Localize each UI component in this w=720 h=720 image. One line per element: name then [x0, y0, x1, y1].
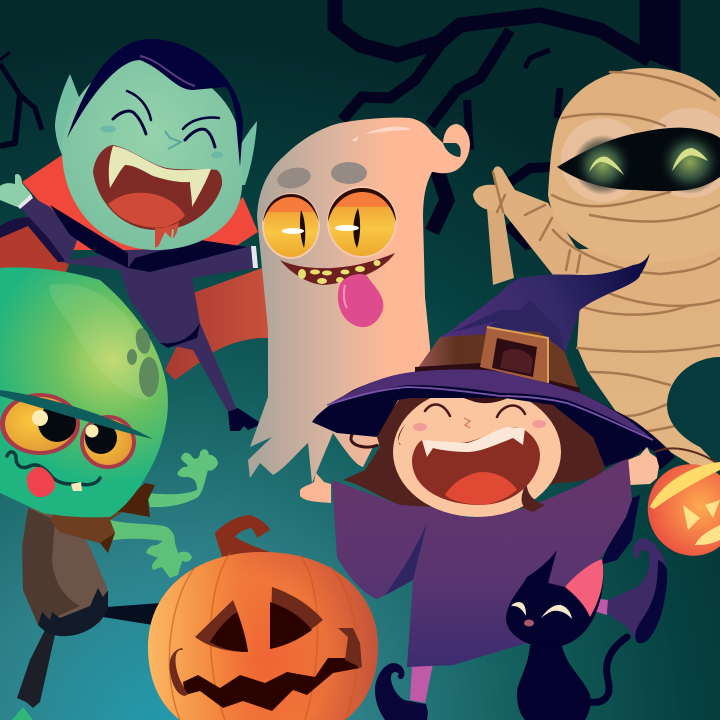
vampire tongue	[108, 193, 185, 248]
vampire lapels	[50, 205, 247, 272]
zombie foot	[12, 707, 33, 720]
zombie left eye	[0, 393, 80, 455]
witch hat band	[415, 330, 580, 393]
vampire head	[62, 60, 242, 250]
cat ear inner	[565, 559, 603, 617]
lantern face	[683, 500, 720, 545]
ghost spots	[275, 162, 367, 191]
vampire cuffs	[16, 194, 258, 268]
witch sleeve backing	[600, 495, 640, 565]
zombie mouth	[7, 452, 100, 485]
mummy bandage lines	[493, 72, 720, 432]
witch hat brim lip	[327, 387, 653, 440]
witch tongue	[445, 472, 517, 505]
witch hat crown shading	[450, 300, 565, 352]
witch left leg	[410, 664, 433, 703]
vampire eyes	[113, 91, 219, 147]
zombie upper arm	[147, 449, 218, 507]
ghost right eye	[327, 186, 397, 258]
witch left sideburn	[398, 425, 405, 445]
witch eyes	[425, 404, 525, 417]
witch hat brim underside	[312, 369, 675, 470]
witch hat brim top	[327, 369, 653, 440]
vampire left hand	[0, 174, 31, 207]
witch right boot	[607, 538, 667, 643]
pumpkin body	[148, 552, 378, 720]
zombie pants	[38, 588, 108, 636]
zombie tongue	[27, 467, 55, 497]
pumpkin left eye	[195, 600, 248, 652]
character: mummy	[473, 68, 720, 470]
zombie left leg	[17, 630, 56, 708]
lantern handle	[653, 448, 720, 505]
witch cheeks	[413, 420, 546, 431]
vampire cape collar	[22, 155, 258, 250]
pumpkin mouth	[183, 658, 360, 711]
witch hat buckle	[480, 327, 548, 383]
cat head	[506, 550, 603, 647]
witch right leg	[590, 598, 608, 615]
vampire hair	[67, 39, 243, 167]
vampire jacket bottom	[160, 323, 200, 348]
vampire mouth	[93, 145, 222, 230]
character: vampire	[0, 39, 268, 431]
witch nose	[464, 418, 470, 428]
vampire cheeks	[100, 126, 223, 158]
character: witch	[300, 253, 720, 720]
mummy eyes	[589, 148, 708, 175]
vampire right cape	[165, 268, 268, 380]
mummy body	[570, 240, 720, 470]
vampire nose	[165, 131, 181, 149]
pumpkin right eye	[270, 587, 323, 649]
witch robe	[332, 457, 632, 667]
lantern	[635, 448, 720, 568]
vampire torso and legs	[60, 246, 256, 412]
mummy forearm	[487, 208, 514, 285]
witch hair	[343, 388, 605, 508]
vampire left cape	[0, 221, 70, 282]
zombie tooth	[71, 482, 82, 491]
zombie right eye	[80, 415, 136, 469]
lantern body	[635, 452, 720, 568]
witch right hair lock	[522, 477, 545, 512]
ghost curl hook	[443, 143, 461, 157]
pumpkin stem	[215, 515, 270, 557]
witch hair curl	[351, 431, 378, 447]
character: zombie	[0, 267, 218, 720]
zombie collar	[50, 483, 155, 553]
lantern opening	[650, 462, 720, 509]
mummy eye band	[557, 128, 720, 191]
witch left hand	[300, 473, 331, 503]
ghost highlight	[352, 127, 411, 142]
witch fringe	[410, 385, 560, 403]
mummy eye glows	[573, 130, 720, 195]
ghost body	[248, 118, 470, 483]
ghost left eye	[262, 193, 320, 259]
cat tail	[590, 637, 627, 702]
zombie spots	[127, 327, 159, 397]
zombie head	[0, 267, 168, 517]
character: pumpkin	[148, 515, 378, 720]
cat eyes	[511, 602, 572, 619]
witch robe fold	[385, 523, 427, 595]
witch mouth	[412, 427, 540, 505]
cat nose	[524, 620, 534, 626]
character: black cat	[506, 550, 627, 720]
ghost tongue	[338, 274, 383, 327]
witch face	[393, 387, 561, 517]
mummy head	[548, 68, 720, 262]
tree branches	[0, 0, 680, 245]
ghost mouth	[280, 253, 395, 285]
vampire ears	[55, 74, 257, 185]
mummy upper arm	[473, 166, 590, 280]
vampire teeth	[109, 146, 211, 207]
zombie torso	[22, 508, 107, 625]
vampire shoe	[228, 408, 262, 431]
zombie right leg	[103, 603, 160, 625]
mummy eye halos	[561, 108, 720, 202]
ghost teeth	[298, 260, 380, 284]
pumpkin ribs	[169, 553, 357, 720]
dark shadow blob	[667, 357, 720, 468]
character: ghost	[248, 118, 470, 483]
witch hat band shadow	[415, 363, 580, 393]
cat body	[517, 645, 591, 720]
zombie brow	[0, 390, 153, 439]
witch hat crown	[415, 253, 650, 393]
pumpkin mouth corners	[170, 628, 362, 696]
witch left boot	[375, 663, 428, 720]
witch teeth	[422, 427, 525, 457]
vampire left sleeve	[20, 197, 78, 265]
vampire hair shine	[140, 56, 195, 86]
zombie head highlight	[50, 284, 148, 400]
witch right hand	[628, 447, 660, 485]
zombie lower arm	[107, 520, 192, 578]
